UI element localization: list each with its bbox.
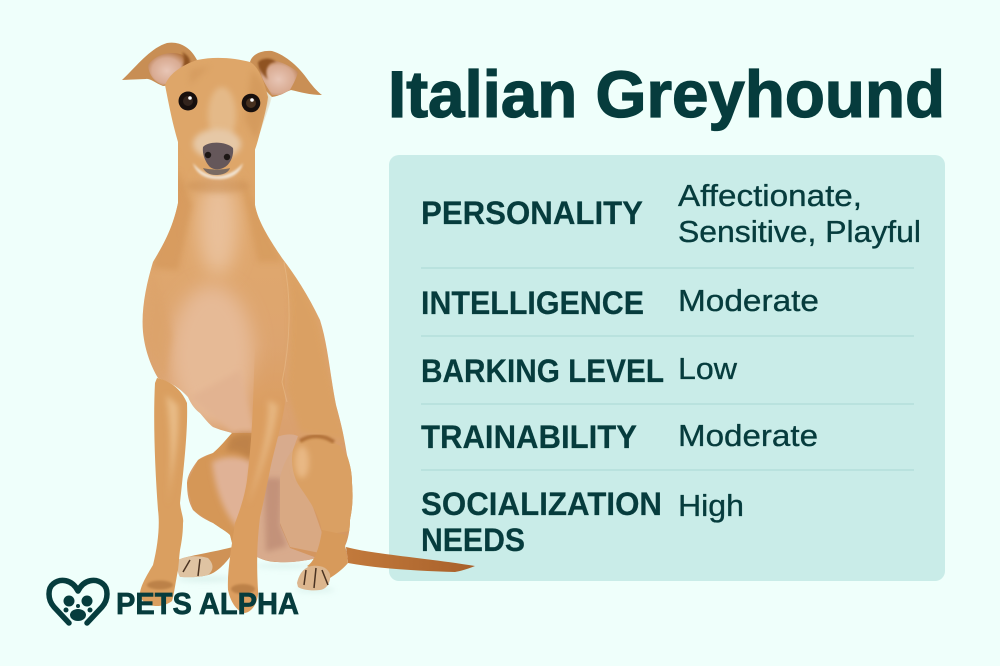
row: barking level: Low [678,351,738,386]
neck light [198,175,238,275]
row: trainability: TRAINABILITY [421,419,637,455]
panel: breed traits [389,155,945,581]
logo: pets alpha [49,580,299,623]
neck shading left [152,170,192,270]
head shading [190,66,270,159]
body [142,142,353,562]
row: intelligence: INTELLIGENCE [421,285,644,321]
eye: left [178,92,198,110]
front leg: left highlight [166,395,178,510]
far paw [178,547,233,577]
chin shadow [186,179,250,193]
shoulder tone [285,262,345,440]
tail [346,547,475,572]
left shoulder tone [160,326,172,368]
eye: right [242,94,260,112]
icon: heart and paw [49,580,107,623]
illustration: dog [122,43,475,613]
row: personality: Affectionate, [678,178,862,213]
neck shading right [244,192,281,262]
haunch base [187,433,252,542]
front leg: right [228,345,285,613]
ear inner: right [259,60,298,95]
title: Italian Greyhound [388,57,945,131]
chest bottom pink [220,394,252,433]
row: socialization needs [421,486,744,558]
panel background [389,155,945,581]
row: socialization needs: NEEDS [421,522,525,558]
front leg: right highlight [248,400,278,505]
ear inner: left [148,53,186,85]
nose [203,143,233,169]
ear: left [122,43,197,86]
row: personality [421,178,921,249]
rear thigh inner [280,450,322,553]
head [165,58,268,178]
row: socialization needs: SOCIALIZATION [421,486,662,522]
toe lines [183,559,328,588]
haunch pink [212,457,252,528]
row: personality: PERSONALITY [421,195,643,231]
ears [122,43,322,97]
logo wordmark: PETS ALPHA [116,586,299,621]
floor shadows [177,564,335,592]
ear fold: right [258,59,276,80]
paw markings [147,580,255,594]
row: personality: Sensitive, Playful [678,214,921,249]
mouth [203,168,230,175]
far paw toes [177,556,212,577]
belly centre shade [264,478,287,552]
row: socialization needs: High [678,488,744,523]
near rear paw [297,566,330,590]
near rear leg [307,530,348,578]
shoulder line [282,262,289,402]
ear fold: left [177,52,190,75]
belly [257,434,314,562]
row: trainability [421,418,818,455]
ear: right [250,51,322,97]
row: barking level: BARKING LEVEL [421,353,664,389]
chest light [170,285,254,425]
haunch shadow [226,431,252,459]
muzzle lip [193,163,243,179]
rear thigh [292,439,353,560]
row: trainability: Moderate [678,418,818,453]
thigh crease [300,436,334,442]
row: intelligence [421,283,819,321]
front leg: left [140,378,187,606]
row: intelligence: Moderate [678,283,819,318]
thigh highlight [295,446,309,478]
